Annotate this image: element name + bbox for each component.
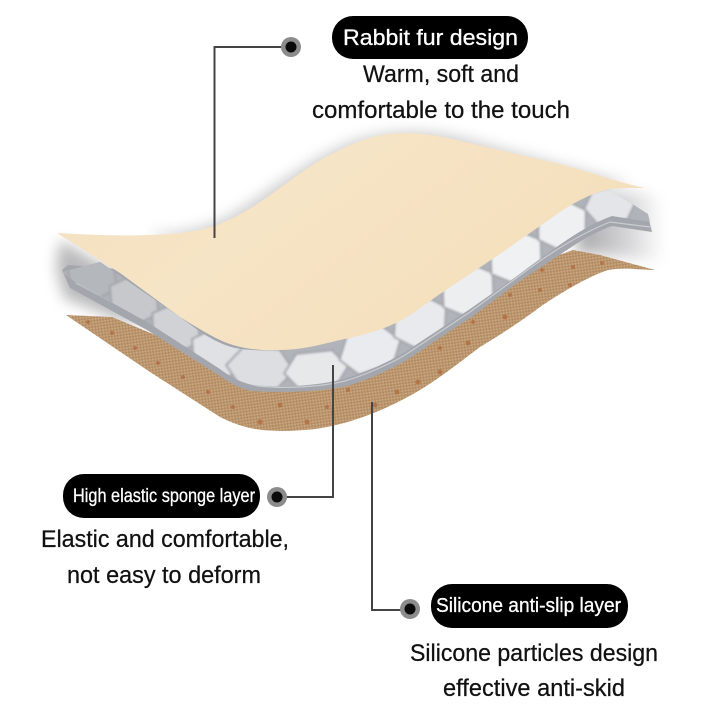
label pill: silicone: Silicone anti-slip layer bbox=[436, 595, 621, 617]
illustration: layered insole bbox=[50, 132, 670, 431]
marker dot: sponge bbox=[267, 487, 287, 507]
leader line: sponge bbox=[285, 365, 333, 497]
marker dot: rabbit fur bbox=[281, 37, 301, 57]
description: sponge bbox=[41, 526, 289, 589]
description: sponge: not easy to deform bbox=[67, 562, 261, 589]
sponge light stripe bbox=[76, 222, 650, 387]
shadow between layers at right bbox=[575, 192, 664, 262]
description: sponge: Elastic and comfortable, bbox=[41, 526, 289, 553]
description: silicone: Silicone particles design bbox=[410, 640, 658, 667]
label pill: sponge bbox=[63, 474, 260, 518]
callout: silicone anti-slip layer bbox=[372, 402, 658, 702]
sponge hexagon quilting bbox=[62, 190, 650, 386]
layer: silicone anti-slip base bbox=[66, 250, 655, 431]
label pill: rabbit fur bbox=[332, 16, 528, 59]
leader line: silicone bbox=[372, 402, 402, 610]
description: rabbit fur: Warm, soft and bbox=[363, 61, 519, 88]
label pill: rabbit fur: Rabbit fur design bbox=[343, 25, 518, 50]
label pill: silicone bbox=[431, 584, 628, 628]
description: rabbit fur: comfortable to the touch bbox=[312, 97, 570, 124]
description: rabbit fur bbox=[312, 61, 570, 124]
shadow between layers at left bbox=[56, 240, 185, 322]
marker dot: silicone bbox=[400, 599, 420, 619]
callout: high elastic sponge layer bbox=[41, 365, 333, 589]
description: silicone: effective anti-skid bbox=[443, 675, 625, 702]
callout: rabbit fur design bbox=[214, 16, 570, 238]
layer: high elastic sponge bbox=[62, 190, 652, 392]
shadow above the top layer bbox=[150, 132, 630, 260]
leader line: rabbit fur bbox=[214, 47, 284, 238]
description: silicone bbox=[410, 640, 658, 702]
layer: rabbit fur top bbox=[57, 133, 645, 350]
silicone dots bbox=[86, 261, 604, 424]
label pill: sponge: High elastic sponge layer bbox=[73, 486, 256, 507]
